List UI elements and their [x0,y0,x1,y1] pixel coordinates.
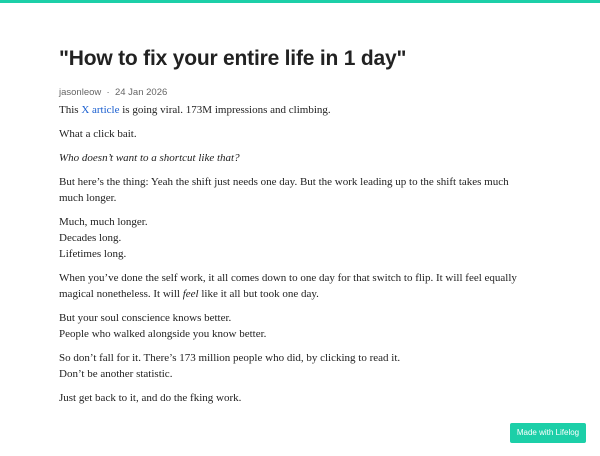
article body: Much, much longer. [59,216,148,228]
article body: But here’s the thing: Yeah the shift just needs one day. But the work leading up to the shift takes much [59,176,509,188]
article body: magical nonetheless. It will feel like it all but took one day. [59,288,319,300]
article body: much longer. [59,192,116,204]
article body: Don’t be another statistic. [59,368,172,380]
button: made with lifelog: Made with Lifelog [517,428,579,437]
article body: But your soul conscience knows better. [59,312,231,324]
article body: Who doesn’t want to a shortcut like that? [59,152,240,164]
button: made with lifelog [510,423,586,443]
meta: author and date: jasonleow · 24 Jan 2026 [59,87,167,98]
article body [59,104,517,404]
article body: Just get back to it, and do the fking work. [59,392,241,404]
article body: This X article is going viral. 173M impressions and climbing. [59,104,331,116]
article body: Lifetimes long. [59,248,126,260]
title: "How to fix your entire life in 1 day" [59,47,406,70]
article body: When you’ve done the self work, it all comes down to one day for that switch to flip. It will feel equally [59,272,517,284]
article body: Decades long. [59,232,121,244]
article body: What a click bait. [59,128,137,140]
article body: So don’t fall for it. There’s 173 million people who did, by clicking to read it. [59,352,400,364]
article body: People who walked alongside you know better. [59,328,266,340]
